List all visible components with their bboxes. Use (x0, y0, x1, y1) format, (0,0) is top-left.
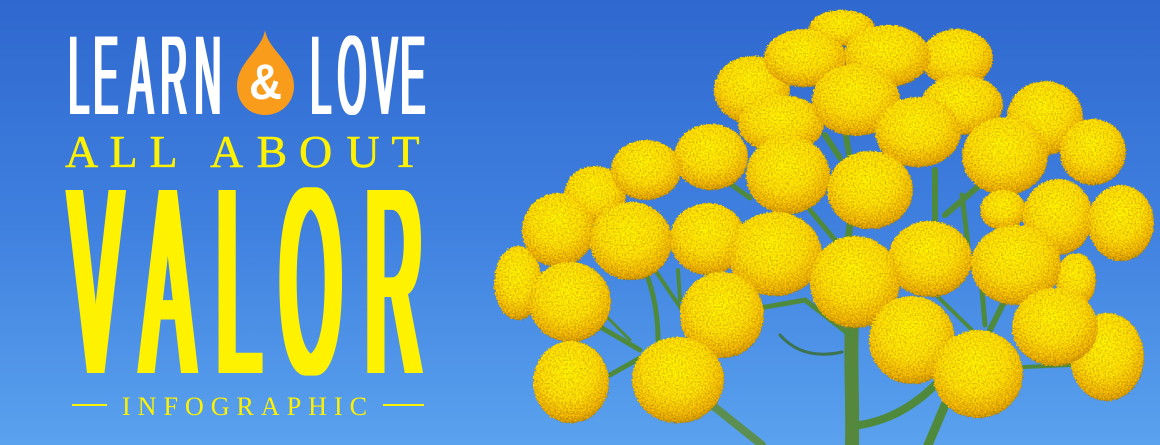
subtitle: infographic: INFOGRAPHIC (122, 392, 367, 421)
flower stems (597, 130, 1070, 445)
icon: orange drop with ampersand: & (249, 54, 282, 110)
heading: valor: VALOR (70, 134, 422, 430)
flower cluster (494, 10, 1154, 423)
heading: learn: LEARN (69, 13, 221, 138)
heading: love: LOVE (310, 13, 425, 138)
icon: orange drop with ampersand (237, 30, 294, 115)
heading: all about: ALL ABOUT (65, 126, 420, 177)
